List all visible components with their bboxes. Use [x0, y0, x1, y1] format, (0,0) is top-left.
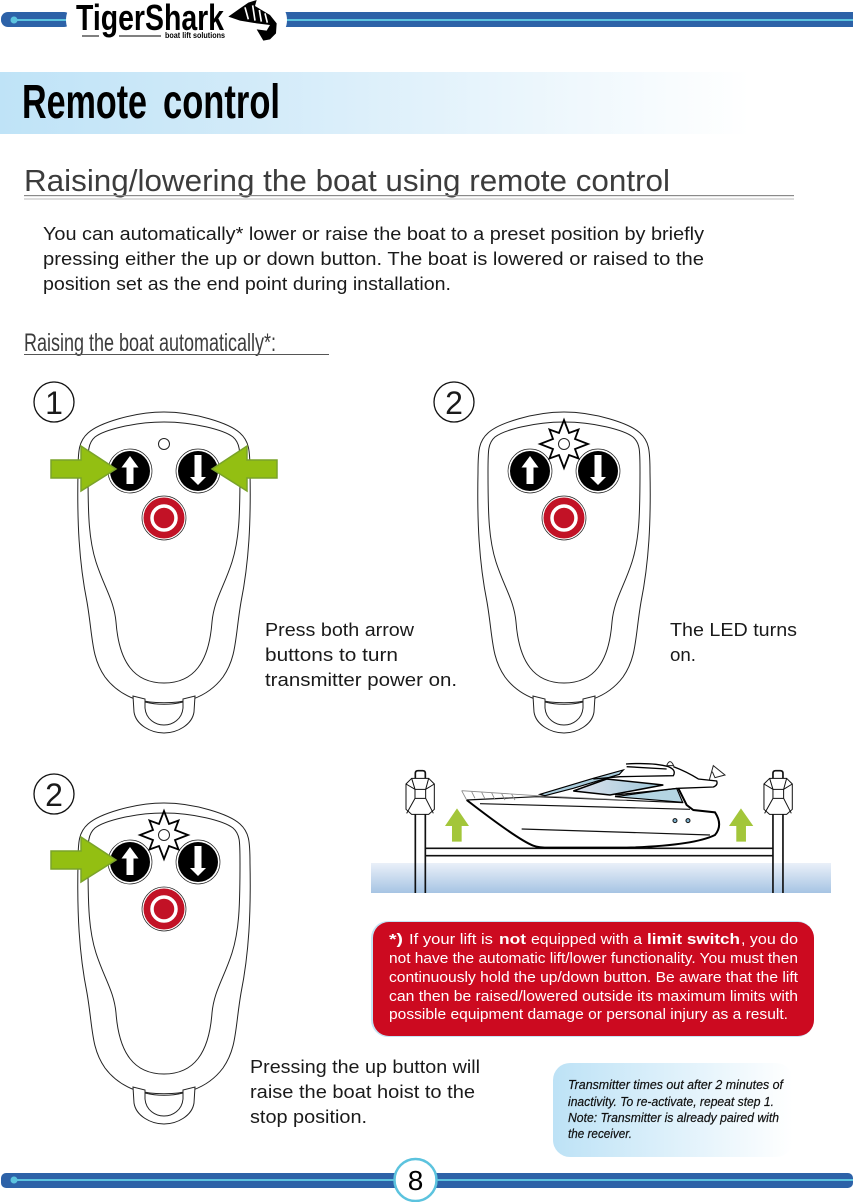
caption step 2: The LED turns [670, 619, 797, 640]
lift frame [406, 771, 792, 893]
note callout [553, 1063, 793, 1157]
caption step 3 [250, 1056, 480, 1127]
note callout: Transmitter times out after 2 minutes of [568, 1078, 785, 1092]
caption step 3: stop position. [250, 1106, 367, 1127]
remote 1 [78, 412, 250, 733]
step badge 1 [34, 382, 74, 422]
intro text [43, 223, 705, 294]
icon: LED glow star [140, 811, 188, 859]
step badge 3 [34, 774, 74, 814]
water [371, 863, 831, 893]
arrow: press up button [51, 446, 116, 491]
page number [394, 1159, 436, 1201]
section heading: Raising/lowering the boat using remote control [24, 163, 670, 198]
warning callout: not have the automatic lift/lower functionality. You must then [389, 951, 798, 967]
page number: 8 [408, 1165, 423, 1196]
warning callout: If your lift is [409, 932, 493, 948]
step badge 2: 2 [445, 385, 463, 421]
warning callout [371, 921, 814, 1037]
title band [0, 72, 750, 134]
title band: control [163, 76, 280, 129]
logo: TigerShark: boat lift solutions [165, 30, 225, 40]
caption step 1: Press both arrow [265, 619, 415, 640]
intro text: You can automatically* lower or raise the boat to a preset position by briefly [43, 223, 705, 244]
step badge 2 [434, 382, 474, 422]
icon: LED glow star [540, 420, 588, 468]
arrow: press up button [51, 837, 116, 882]
remote 3 [78, 803, 250, 1124]
warning callout: , you do [741, 932, 798, 948]
warning callout: limit switch [647, 932, 740, 948]
caption step 3: raise the boat hoist to the [250, 1081, 475, 1102]
warning callout: possible equipment damage or personal injury as a result. [389, 1007, 788, 1023]
intro text: pressing either the up or down button. The boat is lowered or raised to the [43, 248, 704, 269]
warning callout: can then be raised/lowered outside its maximum limits with [389, 989, 798, 1005]
sub heading: Raising the boat automatically*: [24, 329, 276, 357]
caption step 1: buttons to turn [265, 644, 398, 665]
intro text: position set as the end point during installation. [43, 273, 451, 294]
boat [462, 762, 725, 848]
lift arrows [445, 808, 753, 842]
note callout: the receiver. [568, 1127, 632, 1141]
header bar left [1, 8, 78, 32]
footer bar [1, 1173, 853, 1188]
caption step 1: transmitter power on. [265, 669, 457, 690]
note callout: inactivity. To re-activate, repeat step 1. [568, 1095, 774, 1109]
header bar right [275, 8, 853, 32]
note callout: Note: Transmitter is already paired with [568, 1111, 779, 1125]
title band: Remote [22, 76, 147, 129]
step badge 3: 2 [45, 777, 63, 813]
caption step 1 [265, 619, 457, 690]
warning callout: continuously hold the up/down button. Be aware that the lift [389, 970, 798, 986]
caption step 2: on. [670, 644, 696, 665]
step badge 1: 1 [45, 385, 63, 421]
boat lift illustration [371, 762, 831, 893]
remote 2 [478, 412, 650, 733]
warning callout: equipped with a [531, 932, 643, 948]
warning callout: *) [389, 932, 403, 948]
arrow: press down button [212, 446, 277, 491]
caption step 3: Pressing the up button will [250, 1056, 480, 1077]
warning callout: not [499, 932, 526, 948]
caption step 2 [670, 619, 797, 665]
